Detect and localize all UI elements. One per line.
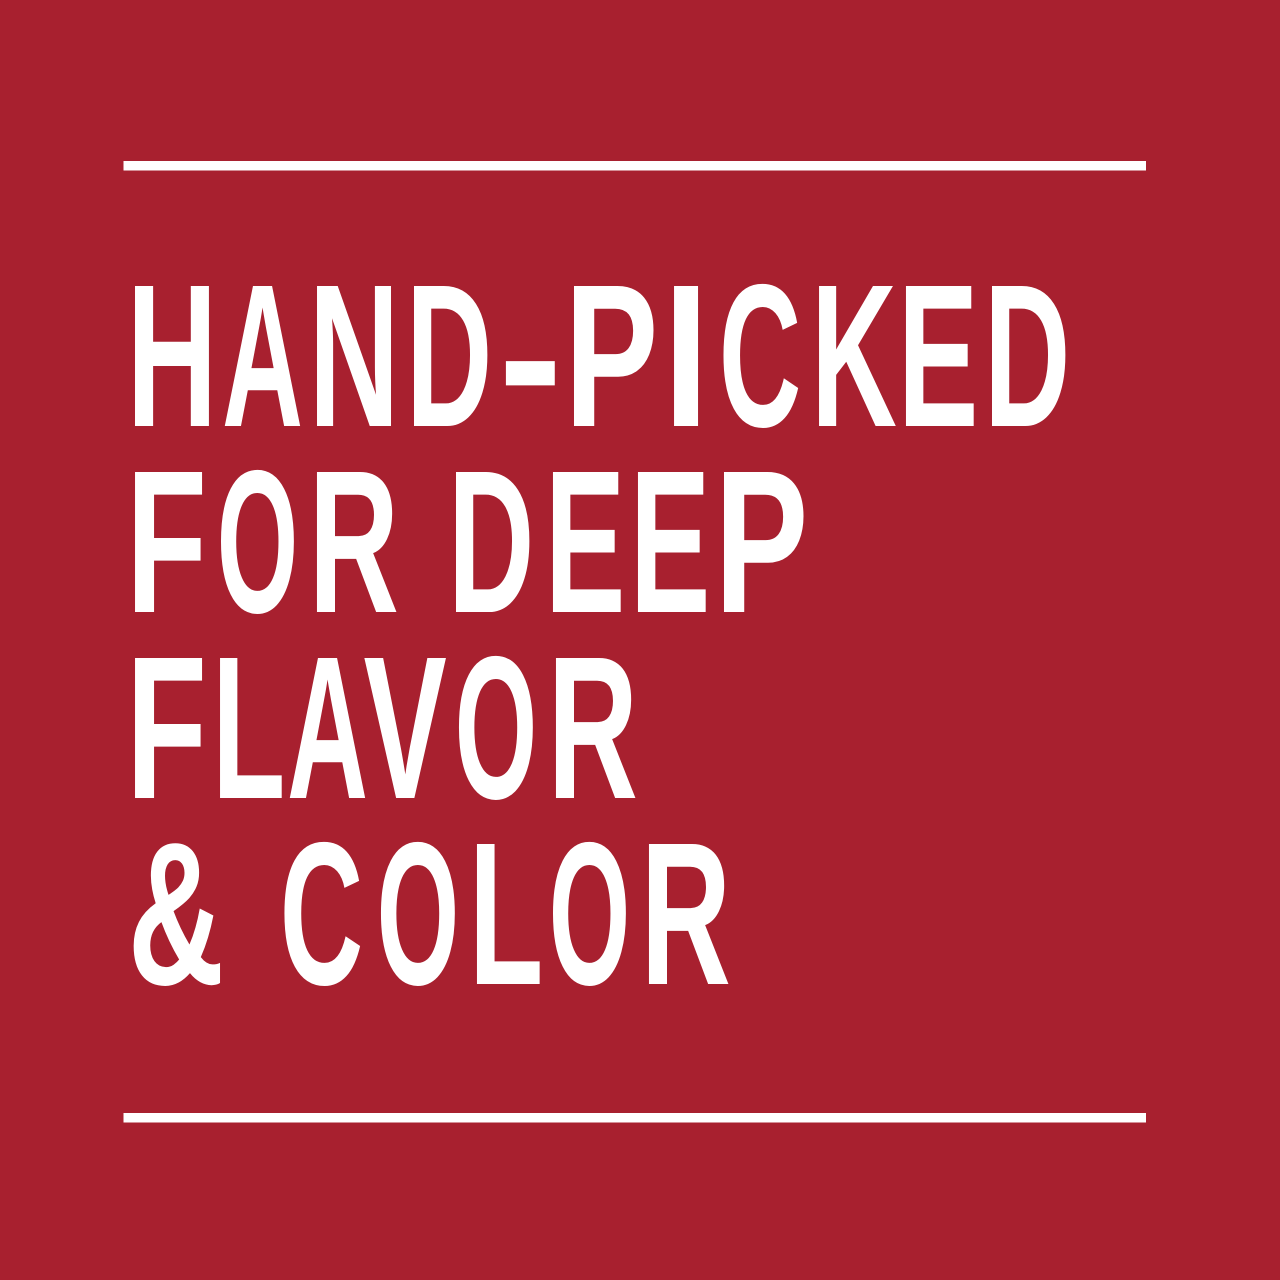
heading: & [128, 801, 224, 1028]
heading: F [126, 429, 207, 656]
heading: C [719, 243, 801, 470]
heading: I [663, 243, 709, 470]
heading: R [309, 429, 399, 656]
top rule [124, 161, 1146, 170]
bottom rule [124, 1113, 1146, 1122]
heading: H [127, 243, 217, 470]
heading: E [545, 429, 625, 656]
heading: O [549, 801, 630, 1028]
heading: C [280, 801, 363, 1028]
heading: V [364, 615, 447, 842]
heading: L [469, 801, 543, 1028]
heading: P [715, 429, 808, 656]
heading: K [811, 243, 897, 470]
heading: F [126, 615, 207, 842]
heading: E [630, 429, 710, 656]
heading: A [222, 243, 303, 470]
heading: R [641, 801, 731, 1028]
heading: A [287, 615, 368, 842]
heading: N [309, 243, 400, 470]
heading: D [406, 243, 492, 470]
heading: O [217, 429, 298, 656]
heading: P [565, 243, 658, 470]
heading: E [898, 243, 978, 470]
heading: O [377, 801, 459, 1028]
heading: - [498, 243, 562, 470]
heading: L [212, 615, 285, 842]
heading: D [448, 429, 534, 656]
heading: R [548, 615, 638, 842]
heading: D [984, 243, 1070, 470]
heading [126, 243, 1070, 1028]
heading: O [455, 615, 537, 842]
